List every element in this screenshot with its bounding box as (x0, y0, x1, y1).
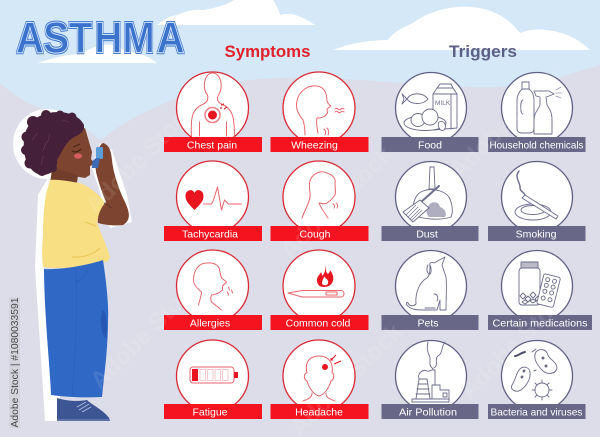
panel: food (382, 72, 478, 152)
panel: headache: Headache (295, 406, 343, 418)
panel: household chemicals (488, 72, 586, 152)
panel: bacteria and viruses: Bacteria and viruses (490, 406, 582, 418)
panel: food: MILK (435, 100, 451, 107)
title: ASTHMA (16, 12, 185, 62)
watermark (80, 61, 578, 437)
panel: tachycardia (164, 161, 262, 241)
heading: symptoms: Symptoms (224, 43, 310, 61)
panel: cough: Cough (300, 228, 331, 240)
panel: pets: Pets (417, 318, 439, 330)
watermark: Adobe Stock (85, 271, 208, 394)
panel: certain medications (488, 250, 592, 330)
panel: common cold: Common cold (286, 318, 351, 330)
cloud: right (333, 7, 590, 50)
panel: air pollution: Air Pollution (399, 406, 457, 418)
panel: smoking: Smoking (516, 228, 557, 240)
panel: food: Food (418, 140, 442, 152)
cloud: top centre (157, 0, 315, 25)
panel: dust (382, 162, 478, 241)
panel: fatigue (164, 340, 262, 419)
panel: allergies (164, 250, 262, 330)
panel: common cold (270, 250, 368, 330)
panel: fatigue: Fatigue (192, 406, 228, 418)
panel: air pollution (382, 340, 478, 419)
panel: chest pain (164, 72, 262, 152)
panel: certain medications: Certain medications (492, 318, 588, 330)
stock id: Adobe Stock | #1080033591 (9, 297, 21, 428)
watermark: Adobe Stock (445, 61, 568, 184)
panel: headache (270, 340, 368, 419)
watermark: Adobe Stock (80, 96, 203, 219)
panel: pets (382, 250, 478, 330)
panel: bacteria and viruses (488, 340, 586, 419)
child figure with inhaler (13, 109, 132, 421)
panel: household chemicals: Household chemicals (490, 140, 584, 152)
panel: smoking (488, 162, 586, 241)
panel: allergies: Allergies (190, 318, 230, 330)
panel: wheezing: Wheezing (291, 140, 338, 152)
heading: triggers: Triggers (449, 43, 517, 61)
watermark: Adobe Stock (275, 141, 398, 264)
watermark: Adobe Stock (455, 281, 578, 404)
panel: cough (270, 161, 368, 241)
hair (21, 110, 84, 176)
panel: dust: Dust (416, 228, 438, 240)
panel: tachycardia: Tachycardia (182, 228, 238, 240)
panel: wheezing (270, 72, 368, 152)
panel: chest pain: Chest pain (187, 140, 237, 152)
cloud: behind title (38, 45, 157, 63)
